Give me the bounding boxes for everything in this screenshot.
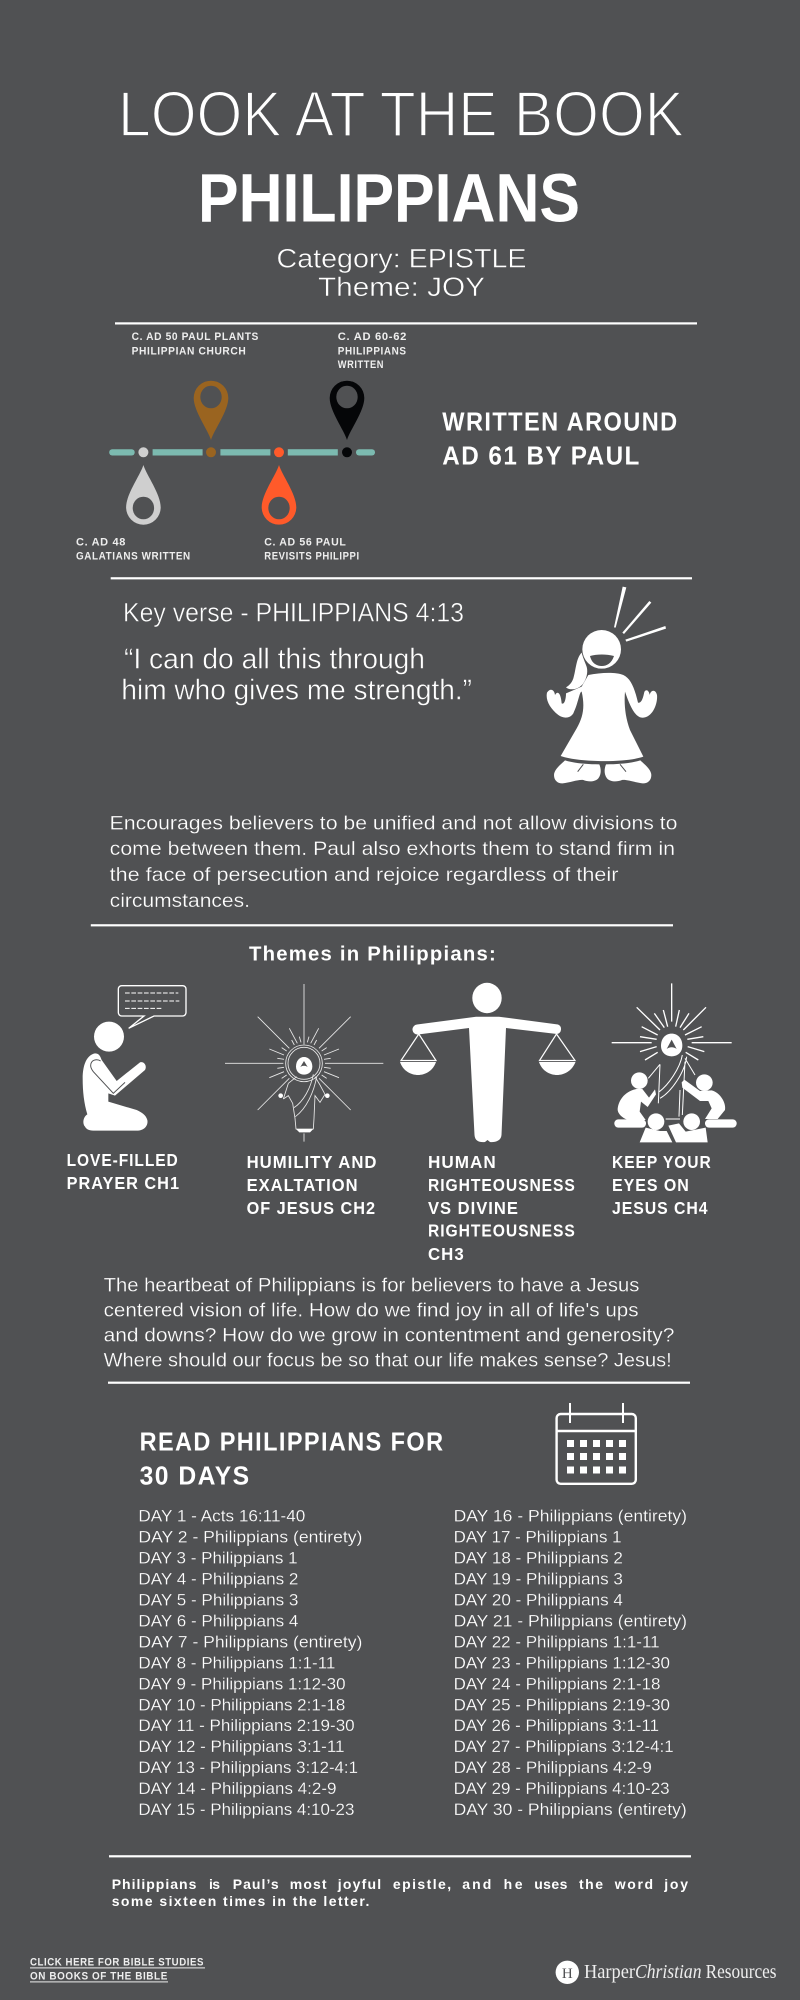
panel: theme 1 prayer [67, 986, 186, 1193]
heartbeat paragraph [104, 1275, 675, 1372]
closing note: joy [663, 1876, 688, 1892]
reading list: days 1-15: DAY 9 - Philippians 1:12-30 [138, 1675, 346, 1693]
reading list: days 16-30: DAY 29 - Philippians 4:10-23 [454, 1780, 670, 1798]
timeline labels bottom: GALATIANS WRITTEN [76, 551, 191, 563]
theme 1 label: PRAYER CH1 [67, 1173, 180, 1193]
logo: HarperChristian Resources [556, 1961, 777, 1984]
reading list: days 16-30: DAY 25 - Philippians 2:19-30 [454, 1696, 670, 1714]
theme 1 label: LOVE-FILLED [67, 1150, 179, 1170]
timeline labels top: PHILIPPIANS [338, 345, 407, 357]
heartbeat paragraph: and downs? How do we grow in contentment and generosity? [104, 1325, 675, 1347]
reading list: days 1-15: DAY 15 - Philippians 4:10-23 [138, 1801, 354, 1819]
reading list: days 1-15: DAY 8 - Philippians 1:1-11 [138, 1654, 335, 1672]
description paragraph: come between them. Paul also exhorts them to stand firm in [110, 838, 675, 860]
closing note: he [504, 1876, 523, 1892]
logo: HarperChristian Resources: Christian [635, 1961, 702, 1983]
icon: grey pin [126, 465, 161, 525]
reading plan heading [140, 1427, 444, 1491]
icon: praying figure [83, 986, 186, 1131]
reading list: days 16-30: DAY 24 - Philippians 2:1-18 [454, 1675, 660, 1693]
reading list: days 1-15: DAY 7 - Philippians (entirety) [138, 1633, 362, 1651]
logo: HarperChristian Resources: H [562, 1966, 573, 1982]
reading list: days 16-30: DAY 26 - Philippians 3:1-11 [454, 1717, 659, 1735]
closing note: joyful [337, 1876, 381, 1892]
theme 4 label: KEEP YOUR [612, 1152, 712, 1172]
theme 3 label: VS DIVINE [428, 1198, 519, 1218]
timeline labels top: C. AD 60-62 [338, 331, 407, 343]
closing note: and [462, 1876, 491, 1892]
reading list: days 1-15: DAY 3 - Philippians 1 [138, 1550, 298, 1568]
reading list: days 16-30: DAY 17 - Philippians 1 [454, 1529, 622, 1547]
timeline labels bottom [76, 537, 360, 563]
timeline labels top [132, 331, 407, 371]
category: Category: EPISTLE [276, 243, 526, 273]
theme 2 label: EXALTATION [247, 1175, 359, 1195]
reading list: days 1-15: DAY 13 - Philippians 3:12-4:1 [138, 1759, 358, 1777]
description paragraph: Encourages believers to be unified and not allow divisions to [110, 812, 678, 834]
theme 2 label [247, 1152, 378, 1218]
theme 1 label [67, 1150, 180, 1193]
closing note: Philippians [112, 1876, 197, 1892]
heartbeat paragraph: The heartbeat of Philippians is for believers to have a Jesus [104, 1275, 640, 1297]
reading list: days 16-30: DAY 23 - Philippians 1:12-30 [454, 1654, 670, 1672]
header: title block [118, 78, 684, 302]
reading list: days 16-30: DAY 20 - Philippians 4 [454, 1592, 623, 1610]
key verse: Key verse - PHILIPPIANS 4:13 [123, 598, 464, 628]
closing note: word [614, 1876, 653, 1892]
title: LOOK AT THE BOOK [118, 78, 684, 150]
reading list: days 16-30: DAY 16 - Philippians (entirety) [454, 1508, 687, 1526]
reading list: days 16-30: DAY 27 - Philippians 3:12-4:1 [454, 1738, 674, 1756]
written around heading: WRITTEN AROUND [442, 407, 679, 437]
theme 2 label: HUMILITY AND [247, 1152, 378, 1172]
reading list: days 1-15: DAY 4 - Philippians 2 [138, 1571, 298, 1589]
theme: Theme: JOY [318, 272, 485, 302]
book name: PHILIPPIANS [198, 160, 580, 237]
description paragraph [110, 812, 678, 912]
reading list: days 16-30: DAY 22 - Philippians 1:1-11 [454, 1633, 660, 1651]
theme 4 label [612, 1152, 712, 1218]
timeline labels top: PHILIPPIAN CHURCH [132, 345, 246, 357]
icon: brown pin [194, 381, 228, 440]
panel: timeline [76, 331, 407, 563]
closing note: most [290, 1876, 327, 1892]
reading list: days 1-15: DAY 14 - Philippians 4:2-9 [138, 1780, 336, 1798]
closing note: Paul’s [233, 1876, 279, 1892]
icon: Jesus with followers [612, 983, 737, 1142]
reading list: days 16-30: DAY 30 - Philippians (entirety) [454, 1801, 687, 1819]
theme 3 label: RIGHTEOUSNESS [428, 1175, 576, 1195]
timeline labels bottom: REVISITS PHILIPPI [264, 551, 360, 563]
timeline labels bottom: C. AD 56 PAUL [264, 537, 346, 549]
reading list: days 1-15: DAY 11 - Philippians 2:19-30 [138, 1717, 355, 1735]
reading list: days 1-15: DAY 1 - Acts 16:11-40 [138, 1508, 305, 1526]
icon: calendar [557, 1403, 636, 1484]
reading list: days 16-30 [454, 1508, 687, 1819]
panel: theme 4 eyes on Jesus [612, 983, 737, 1218]
reading list: days 1-15: DAY 12 - Philippians 3:1-11 [138, 1738, 344, 1756]
key verse [121, 598, 472, 706]
reading plan heading: 30 DAYS [140, 1461, 251, 1491]
reading list: days 16-30: DAY 28 - Philippians 4:2-9 [454, 1759, 652, 1777]
reading list: days 16-30: DAY 21 - Philippians (entirety) [454, 1612, 687, 1630]
closing note: uses [534, 1876, 568, 1892]
icon: joyful kneeling woman [547, 587, 666, 783]
closing note: epistle, [393, 1876, 451, 1892]
closing note: some sixteen times in the letter. [112, 1893, 369, 1909]
theme 3 label [428, 1152, 576, 1264]
closing note [112, 1876, 688, 1909]
theme 2 label: OF JESUS CH2 [247, 1198, 376, 1218]
reading list: days 1-15: DAY 10 - Philippians 2:1-18 [138, 1696, 345, 1714]
icon: orange pin [262, 465, 296, 525]
timeline labels top: WRITTEN [338, 359, 384, 371]
theme 3 label: HUMAN [428, 1152, 497, 1172]
theme 3 label: RIGHTEOUSNESS [428, 1221, 576, 1241]
timeline bar [109, 447, 375, 457]
heartbeat paragraph: Where should our focus be so that our life makes sense? Jesus! [104, 1350, 672, 1372]
description paragraph: circumstances. [110, 890, 250, 912]
heartbeat paragraph: centered vision of life. How do we find joy in all of life's ups [104, 1300, 639, 1322]
themes heading: Themes in Philippians: [249, 943, 497, 966]
icon: radiant Jesus [225, 984, 383, 1142]
link: bible studies: CLICK HERE FOR BIBLE STUDIES [30, 1957, 204, 1969]
panel: theme 3 righteousness [400, 983, 576, 1264]
timeline labels top: C. AD 50 PAUL PLANTS [132, 331, 259, 343]
closing note: is [209, 1876, 220, 1892]
logo: HarperChristian Resources: Harper [584, 1961, 635, 1983]
reading list: days 1-15: DAY 2 - Philippians (entirety) [138, 1529, 362, 1547]
link: bible studies: ON BOOKS OF THE BIBLE [30, 1971, 168, 1983]
panel: theme 2 humility [225, 984, 383, 1218]
icon: black pin [330, 381, 364, 440]
description paragraph: the face of persecution and rejoice regardless of their [110, 864, 619, 886]
reading list: days 1-15: DAY 5 - Philippians 3 [138, 1592, 298, 1610]
icon: person as scales [400, 983, 576, 1142]
reading plan heading: READ PHILIPPIANS FOR [140, 1427, 444, 1457]
logo: HarperChristian Resources: Resources [706, 1961, 777, 1983]
reading list: days 1-15 [138, 1508, 362, 1819]
theme 4 label: EYES ON [612, 1175, 690, 1195]
reading list: days 16-30: DAY 19 - Philippians 3 [454, 1571, 623, 1589]
written around heading: AD 61 BY PAUL [442, 441, 641, 471]
key verse: him who gives me strength.” [121, 674, 472, 706]
reading list: days 1-15: DAY 6 - Philippians 4 [138, 1612, 298, 1630]
closing note: the [579, 1876, 603, 1892]
reading list: days 16-30: DAY 18 - Philippians 2 [454, 1550, 623, 1568]
written around heading [442, 407, 679, 471]
timeline labels bottom: C. AD 48 [76, 537, 126, 549]
key verse: “I can do all this through [124, 644, 425, 676]
theme 3 label: CH3 [428, 1244, 465, 1264]
link: bible studies [30, 1957, 205, 1983]
theme 4 label: JESUS CH4 [612, 1198, 708, 1218]
